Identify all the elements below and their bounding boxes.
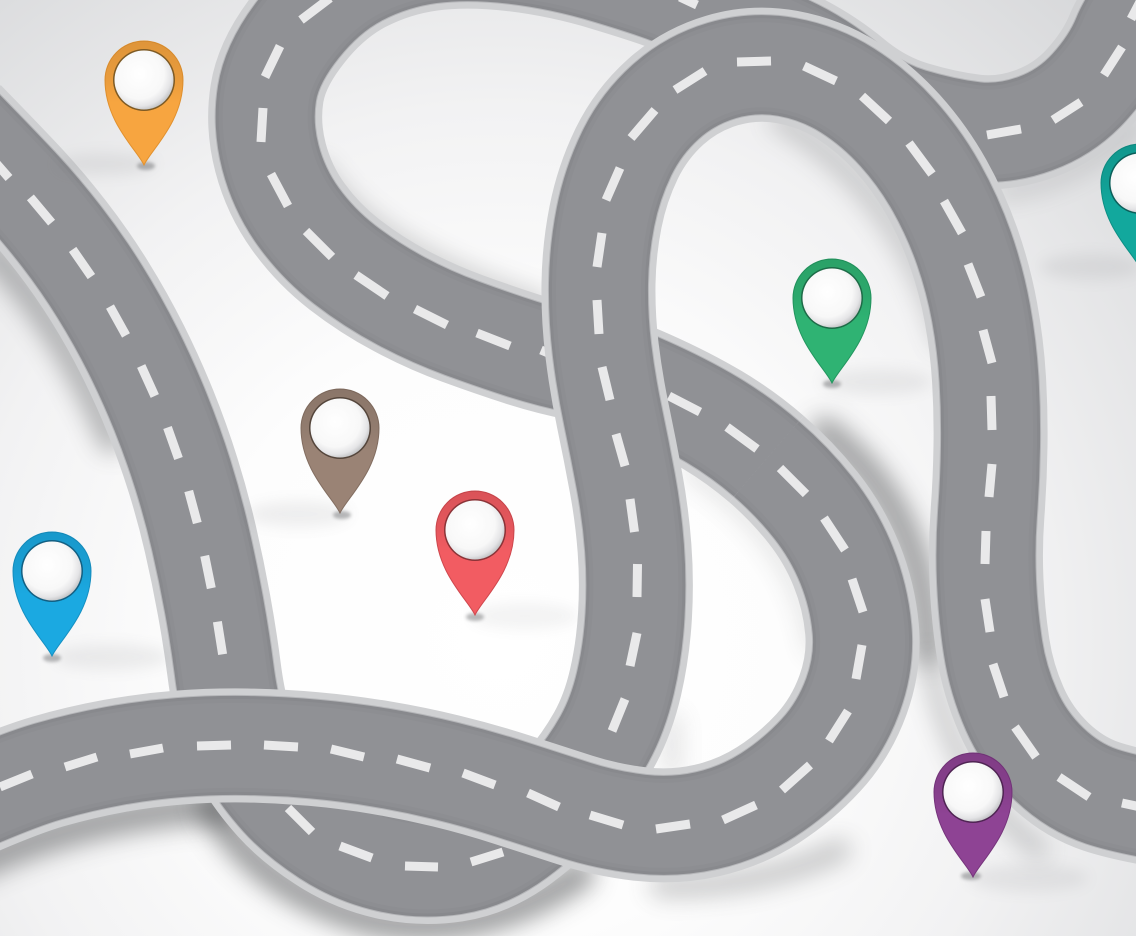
icon: orange map pin <box>56 41 183 175</box>
lane dashes: lower sweep <box>0 468 863 829</box>
icon: red map pin <box>436 491 579 629</box>
lane dashes: upper loop <box>261 0 1136 449</box>
icon: purple map pin <box>934 753 1088 892</box>
road: upper loop section passing under the main road <box>261 0 1136 459</box>
icon: green map pin <box>793 259 932 395</box>
icon: brown map pin <box>246 389 379 527</box>
icon: teal map pin <box>1040 144 1136 280</box>
road: lower sweep crossing over the main road <box>0 459 863 829</box>
icon: blue map pin <box>13 532 170 670</box>
